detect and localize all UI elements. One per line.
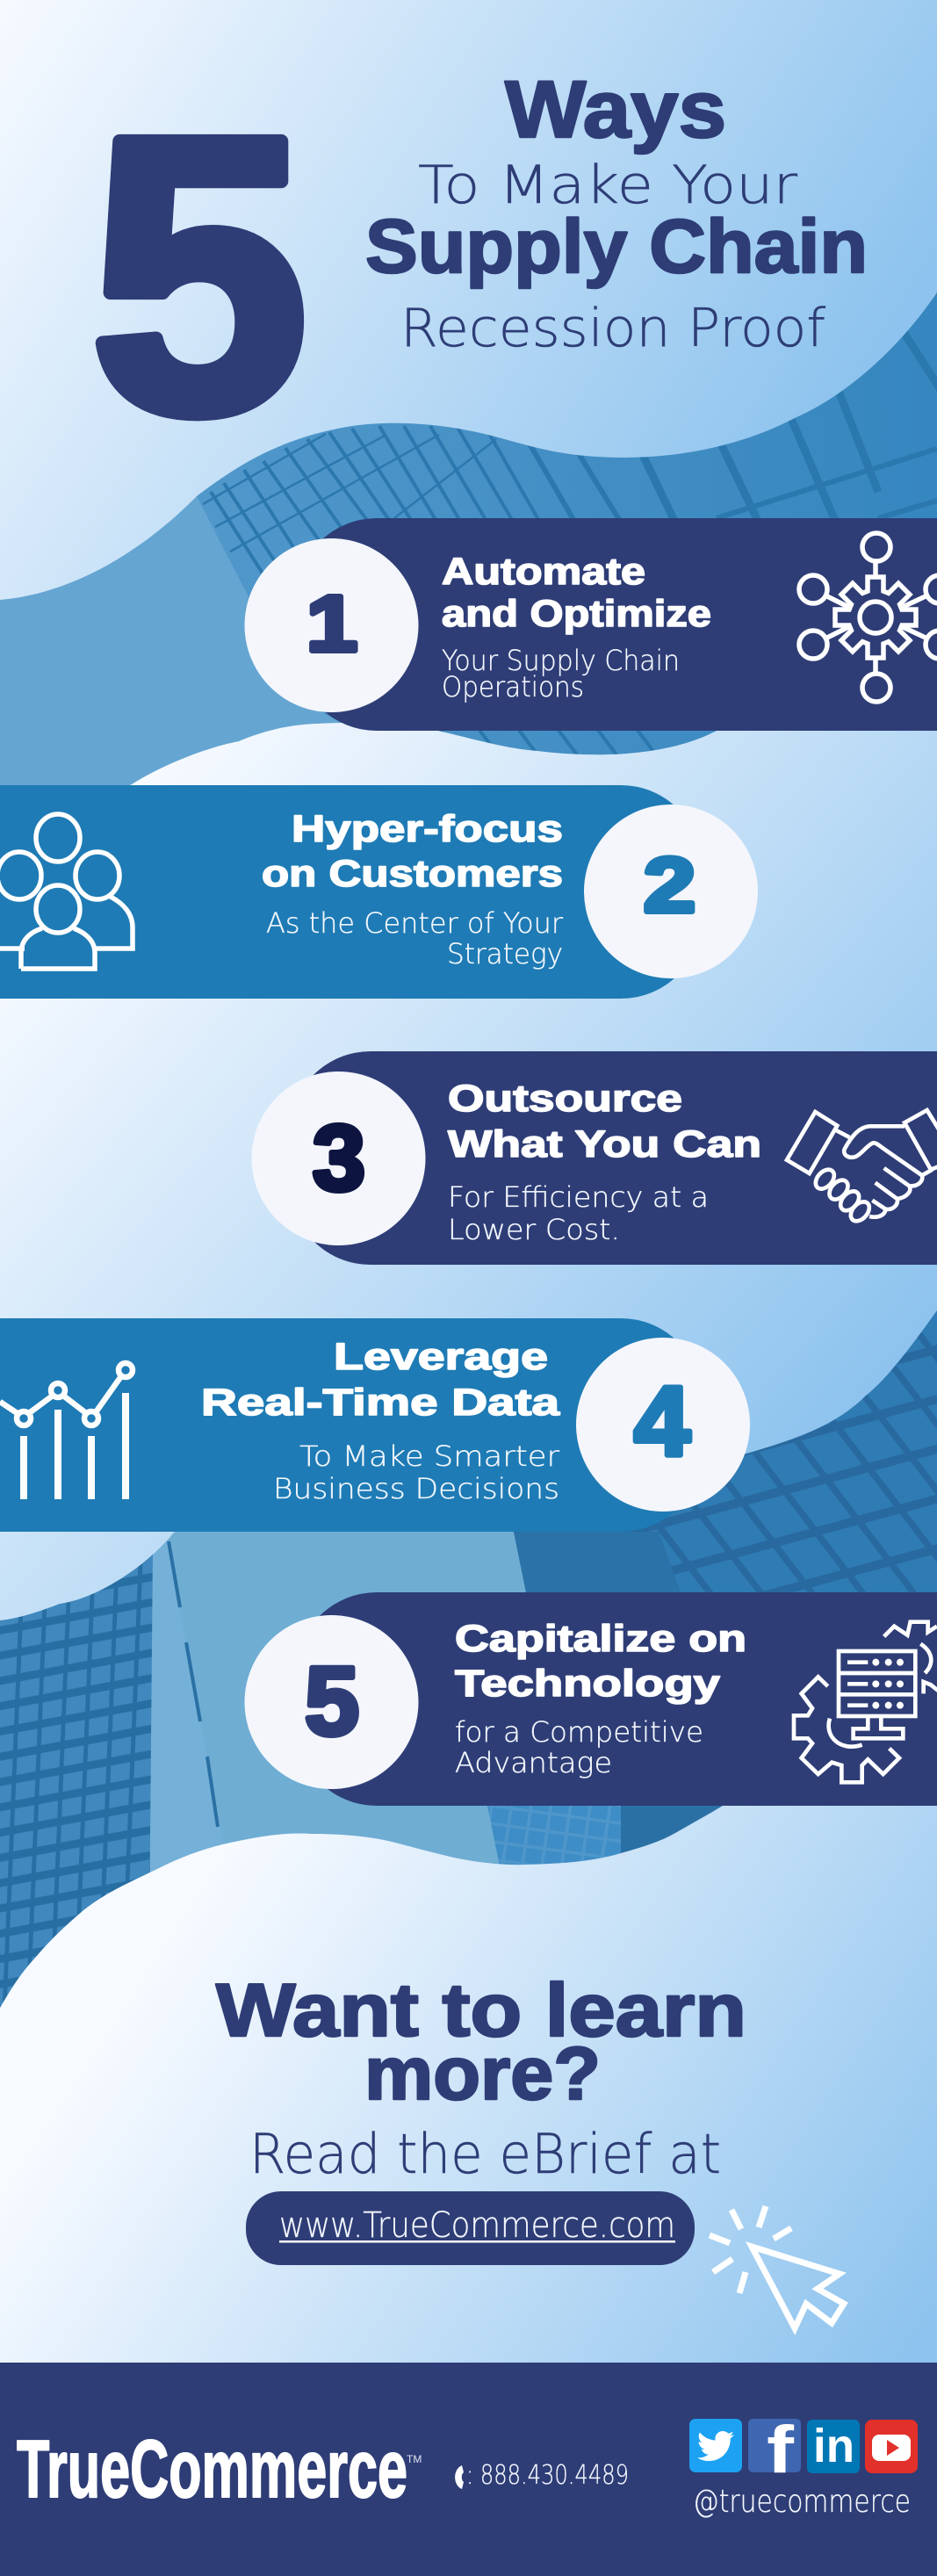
call to action heading [216,1969,746,2116]
title [365,65,868,359]
logo wordmark: TM [407,2453,422,2465]
step 2 banner [0,785,758,999]
step 4 heading [201,1336,560,1424]
icon: server and gears [794,1622,937,1782]
icon: customer group [0,814,133,969]
step 3 heading: What You Can [448,1123,761,1165]
step 3 description: For Efficiency at a [448,1180,709,1214]
step 1 description: Operations [442,670,584,704]
phone number: : 888.430.4489 [466,2460,629,2491]
step 1 heading: and Optimize [442,593,711,635]
step 1 heading: Automate [442,551,645,593]
logo wordmark: TrueCommerce [17,2423,407,2515]
step 2 number badge: 2 [644,841,696,928]
step 2 description: As the Center of Your [266,906,564,940]
step 5 banner [244,1592,937,1806]
step 1 description [442,644,680,704]
step 3 description: Lower Cost. [448,1213,620,1246]
big numeral 5: 5 [90,57,307,494]
call to action heading: Want to learn [216,1969,746,2053]
step 1 heading [442,551,711,635]
step 5 description [455,1715,703,1779]
call to action subheading: Read the eBrief at [249,2122,721,2186]
step 2 description [266,906,564,971]
step 3 banner [251,1051,937,1265]
step 5 heading [455,1618,746,1705]
icon: facebook [748,2413,801,2487]
call to action heading: more? [364,2032,601,2116]
url button: www.TrueCommerce.com [279,2205,675,2246]
step 5 number badge [244,1615,418,1789]
step 4 description: Business Decisions [273,1472,559,1505]
step 2 heading: on Customers [262,853,563,895]
background: building imagery band two [0,1274,937,2029]
step 2 heading [262,808,563,895]
icon: handshake [787,1110,937,1224]
title: Supply Chain [365,205,868,289]
step 3 number badge: 3 [313,1107,365,1210]
step 1 banner [244,518,937,731]
footer bar [0,2363,937,2576]
icon: gear network [799,533,937,702]
step 1 description: Your Supply Chain [442,644,680,677]
top wave panel [0,0,937,600]
step 5 heading: Capitalize on [455,1618,746,1660]
background: building imagery band one [0,263,937,896]
step 5 description: Advantage [455,1746,612,1779]
step 3 heading [448,1078,761,1165]
icon: linkedin: in [813,2420,854,2472]
step 5 number badge: 5 [305,1648,359,1756]
step 4 number badge [576,1338,750,1512]
title: Ways [505,65,726,155]
icon: youtube [865,2420,918,2473]
icon: facebook: f [767,2413,795,2487]
step 5 heading: Technology [455,1663,720,1705]
title: To Make Your [418,155,797,216]
step 1 number badge: 1 [306,581,357,668]
step 3 number badge [251,1072,425,1245]
icon: twitter [689,2419,742,2472]
step 2 heading: Hyper-focus [292,808,563,850]
step 1 number badge [244,538,418,712]
middle wave panel [0,615,937,1620]
step 4 description [273,1440,560,1505]
step 4 heading: Leverage [334,1336,548,1378]
step 4 heading: Real-Time Data [201,1382,560,1424]
step 4 banner [0,1318,750,1532]
bottom wave panel [0,1594,937,2371]
logo wordmark [17,2423,422,2515]
step 2 description: Strategy [447,937,563,971]
step 3 description [448,1180,709,1246]
step 4 description: To Make Smarter [299,1440,560,1473]
step 3 heading: Outsource [448,1078,682,1120]
icon: click cursor [710,2206,844,2328]
title: Recession Proof [400,298,825,359]
url button [246,2191,695,2265]
step 5 description: for a Competitive [455,1715,703,1749]
step 4 number badge: 4 [634,1367,690,1476]
icon: line and bar chart [0,1363,133,1499]
step 2 number badge [584,805,758,978]
